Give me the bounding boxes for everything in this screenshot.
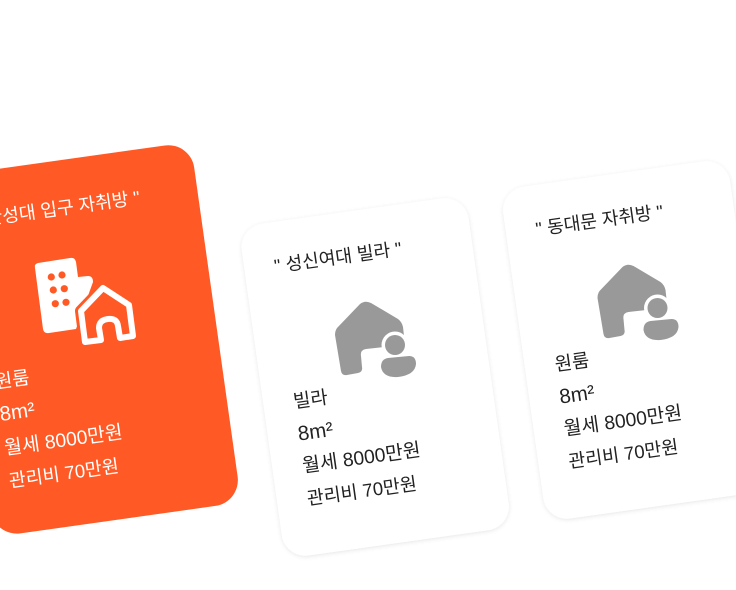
icon: house with person xyxy=(335,302,416,377)
card details: 월세 8000만원 xyxy=(3,421,124,460)
card details xyxy=(292,375,426,509)
card details xyxy=(553,338,688,472)
panel: orange card xyxy=(0,142,241,537)
card background orange xyxy=(0,142,241,537)
card details: 관리비 70만원 xyxy=(306,473,418,509)
icon: building and house xyxy=(35,258,133,342)
card details: 8m² xyxy=(558,381,596,409)
card details: 빌라 xyxy=(292,386,329,412)
card background white xyxy=(238,195,512,559)
card details: 원룸 xyxy=(553,349,591,375)
card details xyxy=(0,355,129,491)
card details: 관리비 70만원 xyxy=(8,455,120,491)
card details: 8m² xyxy=(296,418,335,446)
panel: villa card xyxy=(238,195,512,559)
card details: 월세 8000만원 xyxy=(301,439,422,477)
card background white xyxy=(500,158,736,522)
icon: house with person xyxy=(598,265,678,340)
panel: Dongdaemun card xyxy=(500,158,736,522)
card details: 관리비 70만원 xyxy=(567,436,680,472)
card title: " 성신여대 빌라 " xyxy=(273,239,403,276)
card title: " 동대문 자취방 " xyxy=(534,202,664,239)
card details: 월세 8000만원 xyxy=(562,402,684,440)
